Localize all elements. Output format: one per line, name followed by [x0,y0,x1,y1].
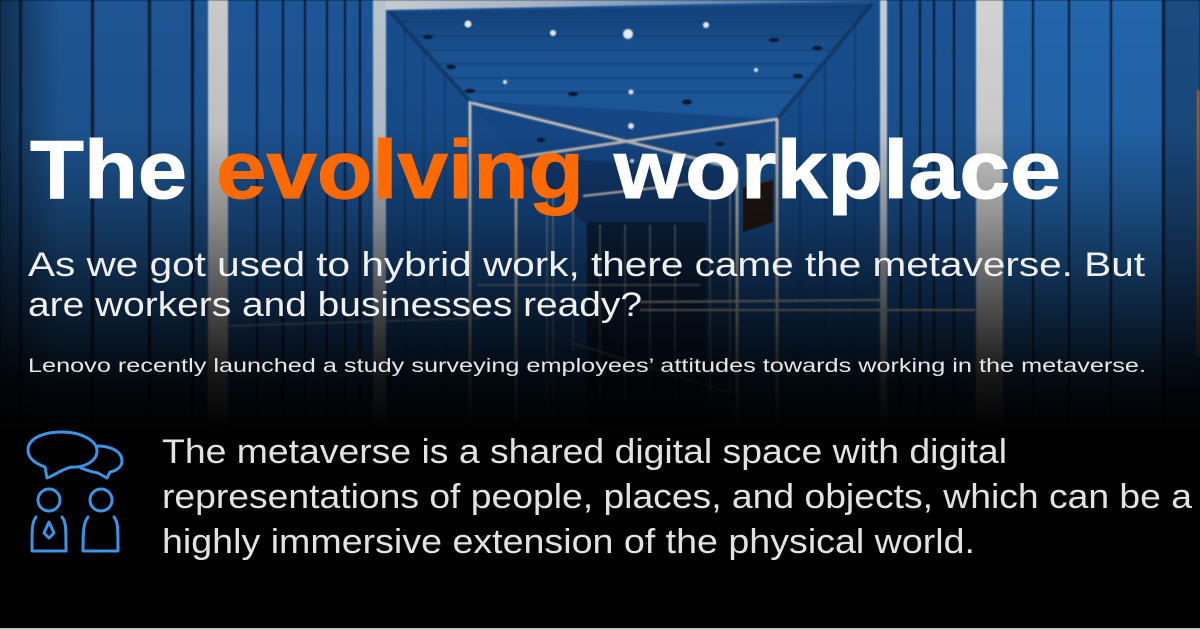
title: workplace [613,123,1061,216]
definition text: representations of people, places, and objects, which can be a [162,478,1192,516]
definition text: highly immersive extension of the physical world. [162,523,975,561]
title [30,123,1061,216]
subtitle [28,246,1146,324]
subtitle: are workers and businesses ready? [28,286,642,324]
study note: Lenovo recently launched a study surveying employees’ attitudes towards working in the metaverse. [28,356,1146,377]
background photo: server corridor [0,0,1200,432]
definition text: The metaverse is a shared digital space with digital [162,433,1007,471]
icon: people talking [28,432,122,551]
title: The [30,123,187,216]
corridor walls [386,0,880,430]
ceiling [390,4,872,119]
subtitle: As we got used to hybrid work, there came the metaverse. But [28,246,1146,284]
definition text [162,433,1192,561]
title: evolving [216,123,584,216]
